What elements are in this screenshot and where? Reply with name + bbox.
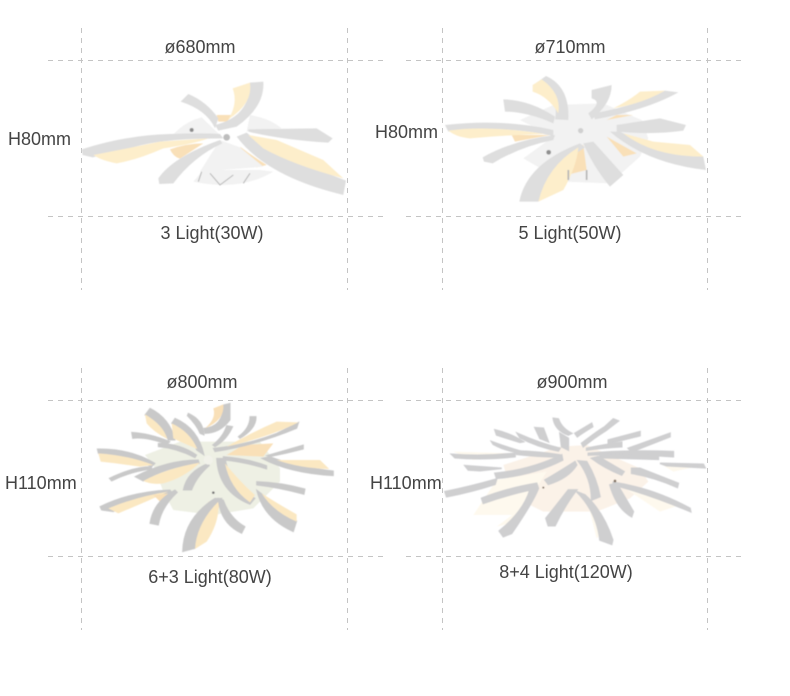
height label: H110mm bbox=[5, 473, 77, 493]
wattage label: 8+4 Light(120W) bbox=[499, 562, 633, 582]
panel: 6+3 light lamp bbox=[5, 372, 333, 587]
lamp photo: 8+4 light bbox=[445, 418, 705, 544]
diameter label: ø680mm bbox=[164, 37, 236, 57]
wattage label: 5 Light(50W) bbox=[518, 223, 622, 243]
lamp photo: 3 light bbox=[82, 82, 346, 195]
diameter label: ø710mm bbox=[534, 37, 606, 57]
lamp photo: 6+3 light bbox=[97, 403, 333, 552]
diameter label: ø800mm bbox=[166, 372, 238, 392]
panel: 3 light lamp bbox=[8, 37, 346, 243]
panel: 8+4 light lamp bbox=[370, 372, 705, 582]
wattage label: 6+3 Light(80W) bbox=[148, 567, 272, 587]
panel: 5 light lamp bbox=[375, 37, 706, 243]
height label: H80mm bbox=[8, 129, 71, 149]
diameter label: ø900mm bbox=[536, 372, 608, 392]
wattage label: 3 Light(30W) bbox=[160, 223, 264, 243]
height label: H80mm bbox=[375, 122, 438, 142]
height label: H110mm bbox=[370, 473, 442, 493]
lamp photo: 5 light bbox=[445, 76, 706, 202]
